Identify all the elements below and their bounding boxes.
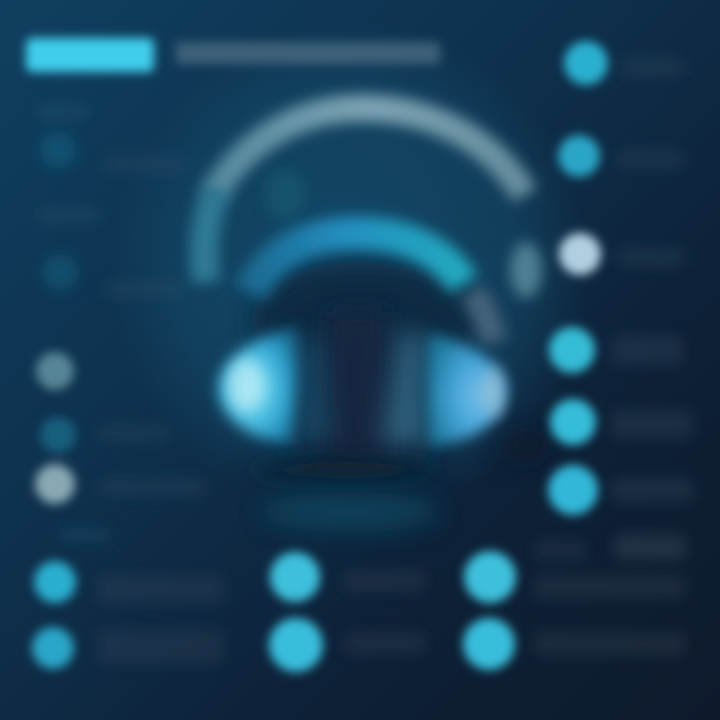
- shadow under cups: [245, 460, 445, 480]
- left column items: [38, 105, 185, 298]
- right cup stem: [382, 330, 425, 445]
- left cup highlight: [228, 359, 264, 411]
- left band descent: [204, 190, 216, 282]
- centre dark wedge: [322, 312, 392, 465]
- left column labels: [100, 425, 205, 496]
- right dark patch: [500, 427, 550, 463]
- bottom row labels: [60, 528, 685, 664]
- inner headband: [250, 233, 464, 292]
- right column dots: [548, 41, 608, 515]
- right ear cup: [426, 334, 506, 446]
- title highlight pill: [26, 38, 154, 72]
- headphones: [204, 108, 550, 532]
- left cup stem: [296, 335, 332, 445]
- right cup rim: [484, 366, 504, 418]
- left ear cup: [218, 328, 298, 444]
- bottom row dots: [32, 551, 516, 672]
- title text placeholder: [176, 42, 440, 64]
- right band blob: [510, 242, 542, 298]
- outer headband: [213, 108, 525, 195]
- dark inner area under the band: [250, 262, 482, 470]
- grey band end: [472, 292, 494, 342]
- title bar: [26, 38, 440, 72]
- reflection below: [260, 492, 440, 532]
- band side shading: [265, 169, 305, 221]
- left column dots: [35, 352, 76, 504]
- right column labels: [612, 58, 692, 502]
